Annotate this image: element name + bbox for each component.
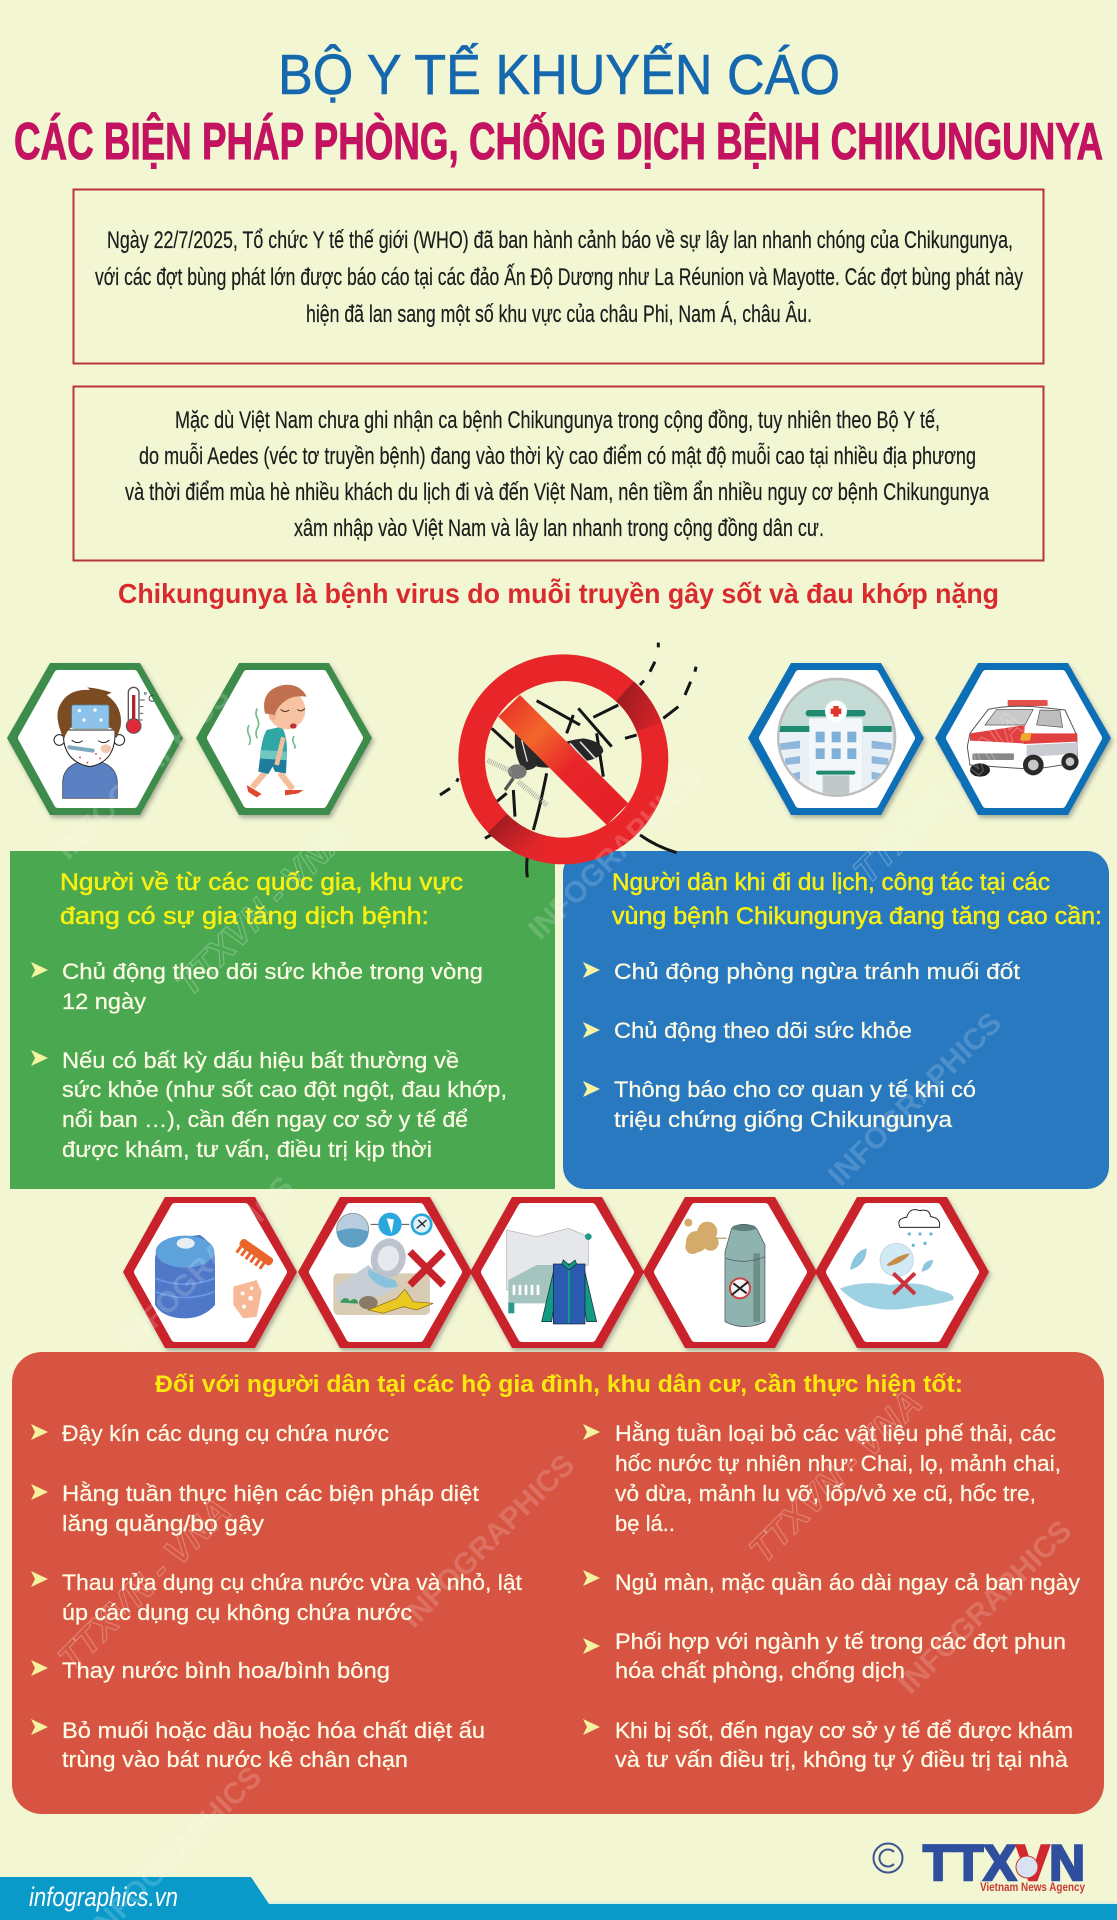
- icon: stagnant water: [815, 1197, 989, 1348]
- list: people travelling: Thông báo cho cơ quan y tế khi có: [614, 1077, 976, 1102]
- icon: ambulance: [935, 663, 1111, 815]
- list: returning travellers: Nếu có bất kỳ dấu hiệu bất thường về: [62, 1048, 459, 1073]
- icon: insecticide spray: [643, 1197, 817, 1348]
- list: returning travellers: Chủ động theo dõi sức khỏe trong vòng: [62, 959, 483, 984]
- icon: hospital: [748, 663, 924, 815]
- logo: TTXVN: Vietnam News Agency: [980, 1880, 1085, 1894]
- list: returning travellers: được khám, tư vấn, điều trị kịp thời: [62, 1137, 432, 1162]
- list: household actions left: trùng vào bát nước kê chân chạn: [62, 1747, 408, 1772]
- list: people travelling: [583, 959, 1020, 1132]
- list: household actions right: Ngủ màn, mặc quần áo dài ngay cả ban ngày: [615, 1570, 1080, 1595]
- list: household actions right: Hằng tuần loại bỏ các vật liệu phế thải, các: [615, 1421, 1056, 1446]
- footer bar: [0, 1877, 1117, 1920]
- watermarks: [50, 680, 1078, 1920]
- text box: Vietnam risk: xâm nhập vào Việt Nam và lây lan nhanh trong cộng đồng dân cư.: [294, 515, 824, 542]
- icon: prohibited mosquito: [440, 643, 696, 877]
- list: household actions right: [583, 1421, 1080, 1772]
- list: household actions right: Phối hợp với ngành y tế trong các đợt phun: [615, 1629, 1066, 1654]
- text box: WHO warning: [74, 190, 1044, 364]
- heading: households: Đối với người dân tại các hộ gia đình, khu dân cư, cần thực hiện tốt:: [155, 1371, 963, 1398]
- list: people travelling: triệu chứng giống Chikungunya: [614, 1107, 953, 1132]
- list: household actions right: hóa chất phòng, chống dịch: [615, 1658, 905, 1683]
- heading: people travelling: Người dân khi đi du lịch, công tác tại các: [612, 869, 1050, 896]
- list: household actions right: hốc nước tự nhiên như: Chai, lọ, mảnh chai,: [615, 1451, 1061, 1476]
- list: returning travellers: [31, 959, 507, 1162]
- list: returning travellers: nổi ban …), cần đến ngay cơ sở y tế để: [62, 1107, 468, 1132]
- watermarks: TTXVN - VNA: [741, 1382, 930, 1571]
- text box: WHO warning: hiện đã lan sang một số khu vực của châu Phi, Nam Á, châu Âu.: [306, 301, 812, 328]
- watermarks: TTXVN - VNA: [167, 815, 356, 1004]
- list: household actions left: úp các dụng cụ không chứa nước: [62, 1600, 412, 1625]
- icon: discarded containers: [298, 1197, 472, 1348]
- list: household actions right: vỏ dừa, mảnh lu vỡ, lốp/vỏ xe cũ, hốc tre,: [615, 1481, 1036, 1506]
- footer bar: infographics.vn: [29, 1882, 178, 1912]
- list: household actions left: Thay nước bình hoa/bình bông: [62, 1658, 390, 1683]
- watermarks: INFOGRAPHICS: [395, 1448, 581, 1634]
- list: people travelling: Chủ động phòng ngừa tránh muối đốt: [614, 959, 1020, 984]
- icon: boy with fever: [7, 663, 183, 815]
- icon: covered water tank: [123, 1197, 297, 1348]
- watermarks: INFOGRAPHICS: [522, 760, 708, 946]
- list: household actions right: Khi bị sốt, đến ngay cơ sở y tế để được khám: [615, 1718, 1073, 1743]
- heading: people travelling: [612, 869, 1102, 930]
- watermarks: INFOGRAPHICS: [822, 1006, 1008, 1192]
- list: household actions left: Bỏ muối hoặc dầu hoặc hóa chất diệt ấu: [62, 1718, 485, 1743]
- heading: returning travellers: [60, 869, 463, 930]
- text box: Vietnam risk: [74, 386, 1044, 560]
- panel: returning travellers: [10, 851, 555, 1189]
- list: returning travellers: sức khỏe (như sốt cao đột ngột, đau khớp,: [62, 1077, 507, 1102]
- logo: TTXVN: TTXVN: [923, 1835, 1085, 1891]
- list: household actions left: lăng quăng/bọ gậy: [62, 1511, 264, 1536]
- panel: people travelling: [563, 851, 1109, 1189]
- list: household actions right: và tư vấn điều trị, không tự ý điều trị tại nhà: [615, 1747, 1069, 1772]
- title: BỘ Y TẾ KHUYẾN CÁO: [278, 42, 840, 107]
- list: household actions left: Thau rửa dụng cụ chứa nước vừa và nhỏ, lật: [62, 1570, 522, 1595]
- list: household actions right: bẹ lá..: [615, 1511, 675, 1536]
- watermarks: INFOGRAPHICS: [114, 1170, 300, 1356]
- list: household actions left: Đậy kín các dụng cụ chứa nước: [62, 1421, 389, 1446]
- list: household actions left: [31, 1421, 522, 1772]
- icon: tired child: [196, 663, 372, 815]
- panel: households: [12, 1352, 1104, 1814]
- watermarks: INFOGRAPHICS: [892, 1514, 1078, 1700]
- list: returning travellers: 12 ngày: [62, 989, 146, 1014]
- list: household actions left: Hằng tuần thực hiện các biện pháp diệt: [62, 1481, 479, 1506]
- title: [14, 42, 1103, 171]
- watermarks: TTXVN - VNA: [845, 703, 1034, 892]
- heading: returning travellers: đang có sự gia tăng dịch bệnh:: [60, 903, 429, 930]
- heading: returning travellers: Người về từ các quốc gia, khu vực: [60, 869, 463, 896]
- heading: people travelling: vùng bệnh Chikungunya đang tăng cao cần:: [612, 903, 1102, 930]
- watermarks: TTXVN - VNA: [50, 1490, 239, 1679]
- subheading: Chikungunya là bệnh virus do muỗi truyền gây sốt và đau khớp nặng: [118, 578, 999, 609]
- watermarks: INFOGRAPHICS: [50, 680, 236, 866]
- list: people travelling: Chủ động theo dõi sức khỏe: [614, 1018, 912, 1043]
- icon: mosquito net and long clothes: [470, 1197, 644, 1348]
